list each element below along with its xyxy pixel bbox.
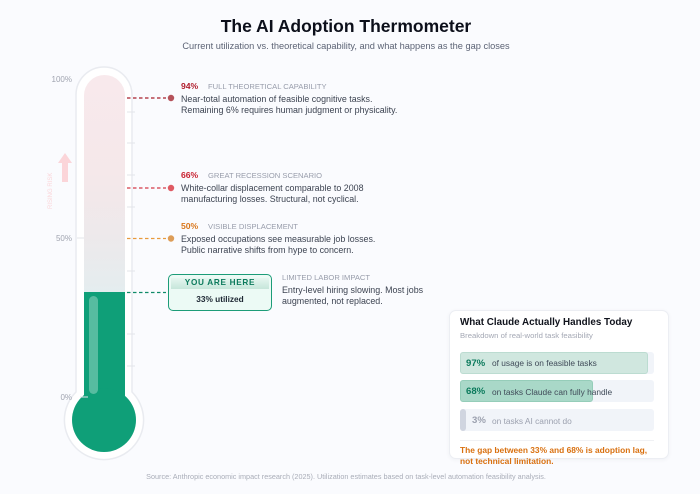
scale ticks: [77, 112, 135, 397]
connector: 50%: [127, 235, 174, 242]
bar: 3%: on tasks AI cannot do: [492, 416, 572, 426]
callout: 33%: [282, 273, 423, 306]
gap takeaway: [460, 444, 647, 466]
badge header: [171, 278, 269, 289]
gap takeaway: The gap between 33% and 68% is adoption lag,: [460, 444, 647, 454]
callout: 94%: FULL THEORETICAL CAPABILITY: [208, 82, 327, 91]
callout: 66%: manufacturing losses. Structural, not cyclical.: [181, 194, 359, 204]
callout: 50%: Public narrative shifts from hype to concern.: [181, 245, 354, 255]
bar: 97%: of usage is on feasible tasks: [492, 358, 597, 368]
callout: 94%: [181, 81, 397, 115]
callout: 66%: White-collar displacement comparable to 2008: [181, 182, 364, 192]
bar: 97%: 97%: [466, 358, 485, 368]
bar: 68%: [460, 380, 654, 402]
thermometer empty tube: [84, 75, 125, 292]
callout: 94%: Near-total automation of feasible cognitive tasks.: [181, 94, 372, 104]
bar: 3%: 3%: [472, 415, 486, 426]
rising risk arrow: RISING RISK: [48, 173, 54, 209]
callout: 33%: Entry-level hiring slowing. Most jobs: [282, 284, 423, 294]
title: The AI Adoption Thermometer: [221, 16, 471, 36]
panel divider: [460, 440, 654, 441]
connector: 94%: [127, 95, 174, 101]
panel subheading: Breakdown of real-world task feasibility: [460, 331, 593, 340]
axis labels: [52, 75, 72, 402]
thermometer mercury fill: [72, 292, 136, 452]
thermometer glass outline: [64, 67, 144, 460]
connector: 66%: [127, 185, 174, 191]
you are here badge: [168, 274, 272, 311]
bar: 3%: [460, 409, 654, 431]
panel: what Claude handles: [449, 310, 669, 459]
callout: 50%: Exposed occupations see measurable job losses.: [181, 234, 375, 244]
callout: 50%: [181, 221, 375, 255]
axis labels: 50%: [56, 234, 72, 243]
callout: 66%: [181, 170, 364, 204]
gap takeaway: not technical limitation.: [460, 456, 554, 466]
callout: 66%: GREAT RECESSION SCENARIO: [208, 171, 322, 180]
callout: 94%: 94%: [181, 81, 198, 91]
axis labels: 100%: [52, 75, 72, 84]
bar: 97%: [460, 352, 654, 374]
callout: 50%: VISIBLE DISPLACEMENT: [208, 222, 298, 231]
callout: 50%: 50%: [181, 221, 198, 231]
badge header: YOU ARE HERE: [185, 278, 255, 287]
callout: 33%: LIMITED LABOR IMPACT: [282, 273, 370, 282]
connector: 33%: [127, 292, 166, 294]
source note: Source: Anthropic economic impact research (2025). Utilization estimates based on task-level automation feasibility analysis.: [146, 472, 546, 481]
bar: 68%: on tasks Claude can fully handle: [492, 386, 612, 396]
callout: 33%: augmented, not replaced.: [282, 296, 383, 306]
axis labels: 0%: [60, 393, 72, 402]
callout: 94%: Remaining 6% requires human judgment or physicality.: [181, 105, 397, 115]
mercury highlight: [89, 296, 98, 394]
bar: 68%: 68%: [466, 386, 485, 397]
panel heading: What Claude Actually Handles Today: [460, 316, 632, 328]
subtitle: Current utilization vs. theoretical capability, and what happens as the gap closes: [182, 41, 510, 51]
badge value: 33% utilized: [196, 294, 244, 304]
rising risk arrow: [48, 153, 72, 209]
callout: 66%: 66%: [181, 170, 198, 180]
